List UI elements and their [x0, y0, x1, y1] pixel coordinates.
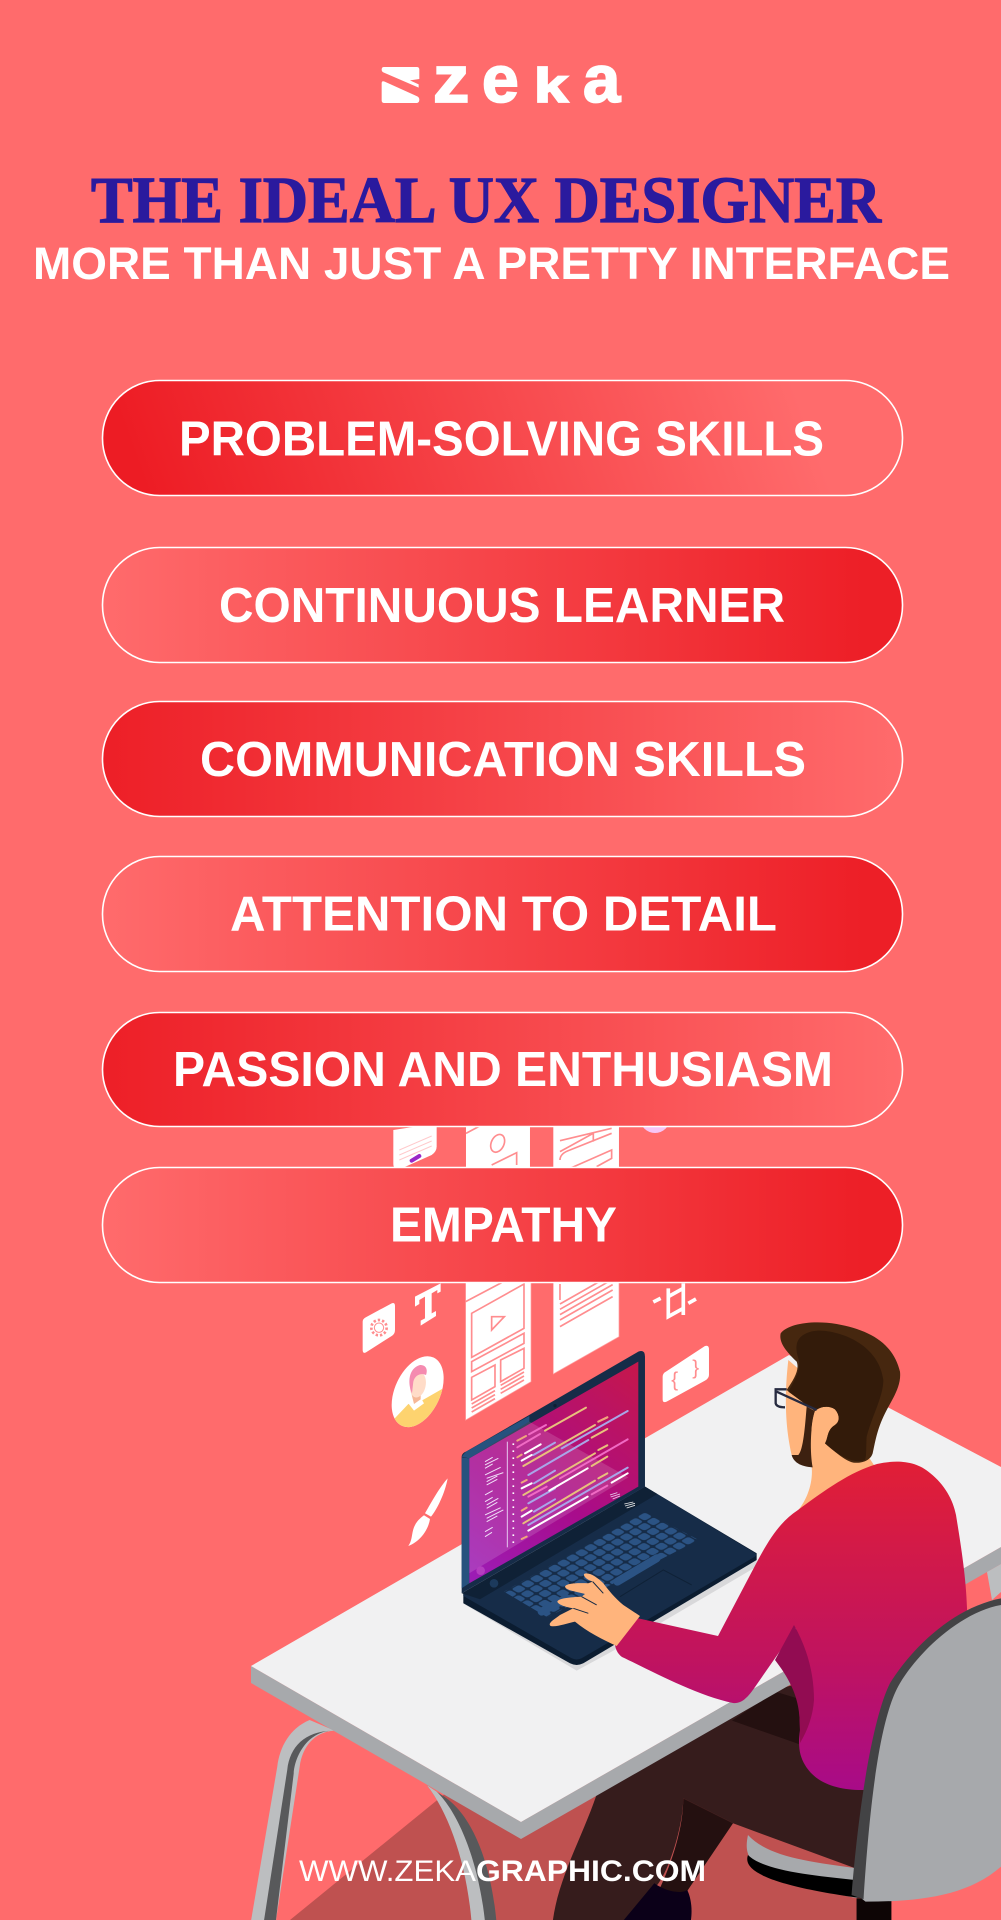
hand — [550, 1573, 640, 1646]
pill: passion and enthusiasm: PASSION AND ENTHUSIASM — [173, 1043, 833, 1097]
screen menu icon — [610, 1493, 620, 1499]
pill: attention to detail — [102, 856, 902, 972]
pill: empathy — [102, 1168, 902, 1282]
icon: paint brush — [408, 1478, 448, 1546]
icon: settings gear tile — [363, 1303, 395, 1353]
subtitle: MORE THAN JUST A PRETTY INTERFACE — [33, 238, 950, 289]
sweater fold — [775, 1625, 814, 1743]
stool seat — [747, 1835, 891, 1920]
pill: communication skills: COMMUNICATION SKILLS — [200, 733, 806, 787]
logo wordmark — [433, 42, 621, 117]
beard — [792, 1407, 815, 1467]
hair — [780, 1322, 900, 1463]
pill: problem-solving skills — [102, 380, 902, 496]
icon: text wireframe card — [553, 1120, 619, 1374]
pill: empathy: EMPATHY — [390, 1198, 617, 1252]
desk — [251, 1355, 1001, 1839]
icon: small circle — [640, 1103, 670, 1133]
logo wordmark: e — [482, 42, 519, 116]
pill: problem-solving skills: PROBLEM-SOLVING SKILLS — [179, 412, 824, 466]
title: THE IDEAL UX DESIGNER — [91, 164, 882, 237]
laptop base — [463, 1487, 757, 1665]
icon: avatar — [392, 1356, 444, 1428]
website url: WWW.ZEKAGRAPHIC.COM — [299, 1855, 706, 1888]
ear — [812, 1407, 838, 1447]
laptop — [462, 1351, 757, 1671]
pill: passion and enthusiasm — [102, 1012, 902, 1126]
logo wordmark: a — [583, 42, 621, 117]
chair back — [852, 1598, 1001, 1902]
logo — [382, 42, 621, 117]
icon: text tool T — [415, 1283, 441, 1326]
laptop screen — [469, 1362, 638, 1583]
sweater — [615, 1462, 975, 1790]
person legs — [553, 1683, 868, 1920]
person head — [776, 1322, 900, 1510]
laptop shadow — [463, 1557, 757, 1671]
file sidebar — [485, 1457, 503, 1537]
pill: continuous learner — [102, 548, 902, 662]
logo wordmark: k — [534, 58, 569, 112]
icon: code braces tile: { — [671, 1369, 678, 1392]
laptop lid — [462, 1351, 645, 1593]
icon: video wireframe card upper — [466, 1120, 530, 1170]
icon: video wireframe card lower — [466, 1280, 531, 1420]
glasses — [776, 1389, 817, 1410]
icon: crop tool — [653, 1283, 696, 1317]
icon: code braces tile — [663, 1346, 709, 1402]
desk legs — [251, 1720, 496, 1920]
pill: continuous learner: CONTINUOUS LEARNER — [219, 579, 785, 633]
code gutter — [506, 1442, 509, 1547]
floating UI icons — [363, 1103, 709, 1546]
logo mark — [382, 67, 419, 103]
pill: communication skills — [102, 702, 902, 816]
icon: code braces tile: } — [692, 1356, 699, 1379]
neck and face — [786, 1360, 875, 1510]
logo wordmark: z — [433, 42, 469, 116]
pill: attention to detail: ATTENTION TO DETAIL — [230, 888, 777, 942]
keyboard — [504, 1513, 697, 1617]
floor shadow — [290, 1680, 870, 1920]
code lines — [517, 1408, 628, 1539]
icon: form card — [393, 1123, 437, 1169]
